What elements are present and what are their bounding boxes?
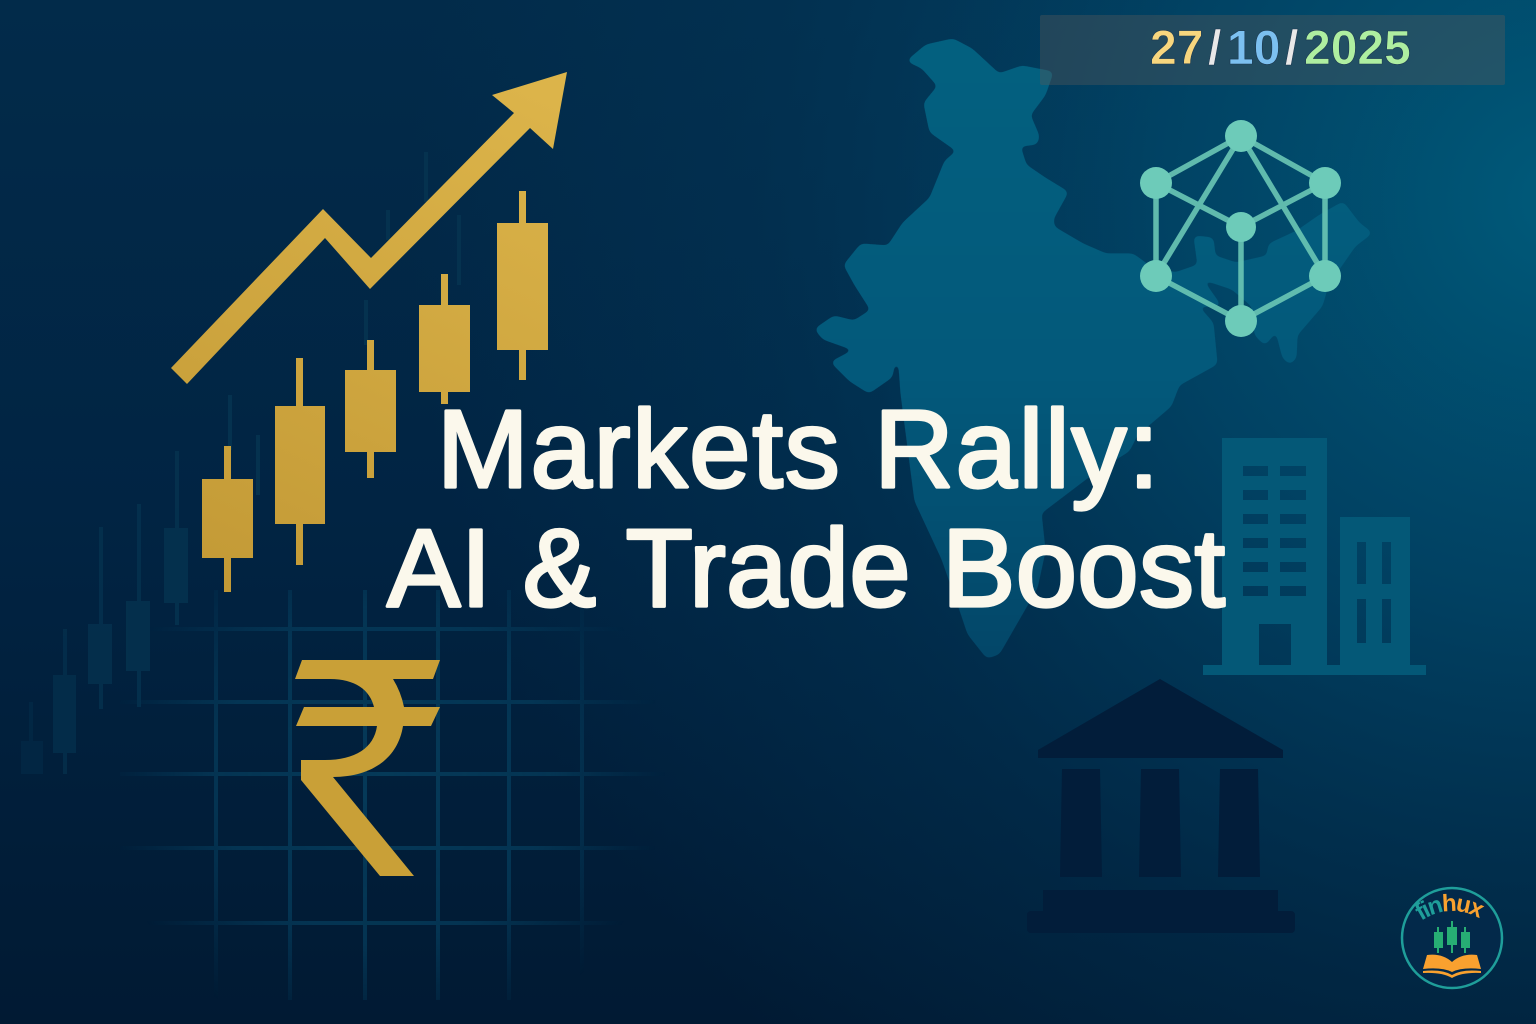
faded candlesticks	[21, 152, 461, 774]
logo wordmark: finhux	[1415, 894, 1484, 920]
date: /	[1285, 22, 1298, 75]
date: /	[1208, 22, 1221, 75]
title	[387, 388, 1225, 630]
finhux logo	[1400, 886, 1504, 990]
candle 1	[202, 446, 253, 592]
date: 10	[1227, 22, 1280, 75]
bank icon	[1027, 679, 1295, 933]
gold candlesticks	[202, 191, 548, 592]
date: 2025	[1304, 22, 1411, 75]
logo book	[1423, 955, 1481, 978]
title line 2: AI & Trade Boost	[387, 507, 1225, 630]
office buildings icon	[1203, 438, 1426, 675]
logo candlesticks	[1434, 921, 1470, 953]
date: 27	[1150, 22, 1203, 75]
rising arrow	[171, 72, 567, 384]
title line 1: Markets Rally:	[437, 388, 1159, 511]
candle 2	[275, 358, 325, 565]
map of India	[815, 39, 1372, 658]
network icon	[1140, 120, 1341, 337]
rupee symbol	[295, 660, 440, 876]
grid lines	[146, 590, 624, 1000]
date panel	[1040, 15, 1505, 85]
candle 4	[419, 274, 470, 404]
candle 3	[345, 340, 396, 478]
candle 5	[497, 191, 548, 380]
